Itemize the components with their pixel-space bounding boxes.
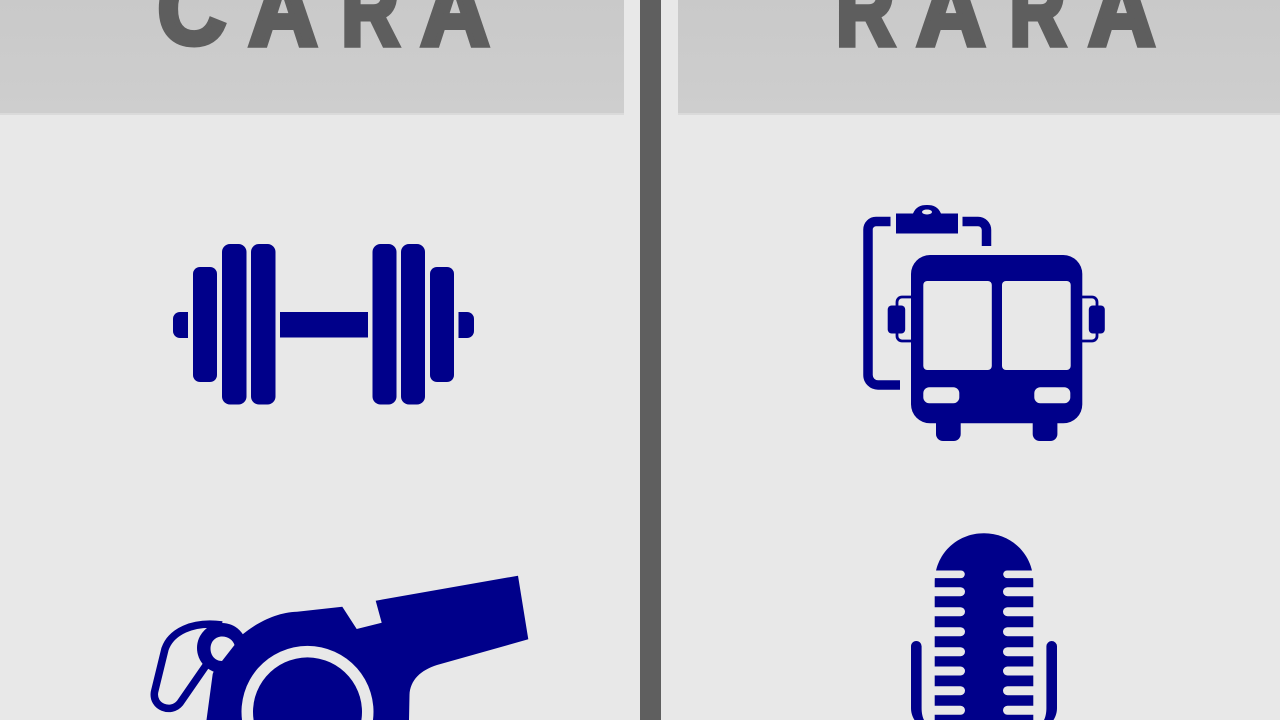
center divider xyxy=(640,0,661,720)
icon: bus with clipboard xyxy=(868,205,1105,441)
heading: RARA xyxy=(836,0,1155,66)
panel: left header band xyxy=(0,0,624,115)
panel: right header band xyxy=(678,0,1280,115)
icon: microphone xyxy=(911,533,1057,720)
heading: CARA xyxy=(158,0,489,66)
icon: whistle xyxy=(154,576,528,720)
icon: dumbbell xyxy=(173,244,474,404)
